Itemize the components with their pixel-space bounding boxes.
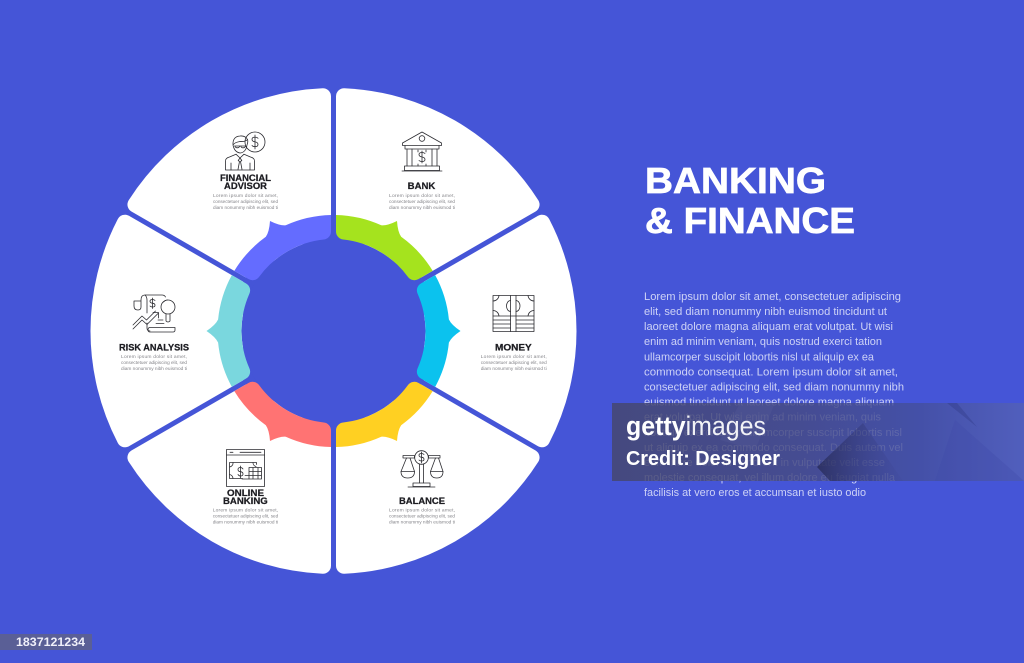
label: online banking: BANKING xyxy=(223,496,268,507)
title: BANKING xyxy=(645,160,826,201)
panel: bank segment xyxy=(278,62,556,311)
ring arc: risk analysis xyxy=(206,275,250,387)
text: bank description: Lorem ipsum dolor sit amet, xyxy=(389,193,455,199)
text block: body copy: consectetuer adipiscing elit, sed diam nonummy nibh xyxy=(644,382,904,394)
panel: balance segment xyxy=(278,351,556,600)
label: money: MONEY xyxy=(495,343,532,354)
ring arc: balance xyxy=(327,375,445,469)
center circle xyxy=(242,239,426,423)
text block: body copy: enim ad minim veniam, quis nostrud exerci tation xyxy=(644,336,882,348)
image id tag xyxy=(0,634,92,650)
text: financial advisor description: consectetuer adipiscing elit, sed xyxy=(213,199,278,205)
text: bank description: diam nonummy nibh euismod ti xyxy=(389,205,455,211)
title: & FINANCE xyxy=(645,200,855,241)
text: financial advisor description: diam nonummy nibh euismod ti xyxy=(213,205,278,211)
text block: body copy xyxy=(644,291,904,499)
text: bank description xyxy=(389,193,455,211)
wheel diagram xyxy=(91,62,576,600)
label: risk analysis: RISK ANALYSIS xyxy=(119,343,189,354)
panel: risk analysis segment xyxy=(91,215,243,447)
text: balance description: Lorem ipsum dolor sit amet, xyxy=(389,508,455,514)
panel: online banking segment xyxy=(111,351,389,600)
text block: body copy: erat volutpat. Ut wisi enim ad minim veniam, quis xyxy=(644,412,881,424)
text: financial advisor description xyxy=(213,193,278,211)
text block: body copy: nostrud exerci tation ullamcorper suscipit lobortis nisl xyxy=(644,427,902,439)
text block: body copy: molestie consequat, vel illum dolore eu feugiat nulla xyxy=(644,472,896,484)
ring arc: money xyxy=(417,275,460,387)
text: online banking description: diam nonummy nibh euismod ti xyxy=(213,520,278,526)
watermark band xyxy=(612,403,1024,481)
label: financial advisor xyxy=(220,173,271,192)
icon: online banking xyxy=(226,450,264,486)
text: online banking description: consectetuer adipiscing elit, sed xyxy=(213,514,278,520)
text: balance description: consectetuer adipiscing elit, sed xyxy=(389,514,455,520)
text: balance description xyxy=(389,508,455,526)
text: balance description: diam nonummy nibh euismod ti xyxy=(389,520,455,526)
text: risk analysis description: consectetuer adipiscing elit, sed xyxy=(121,360,187,366)
text: bank description: consectetuer adipiscing elit, sed xyxy=(389,199,455,205)
label: financial advisor: ADVISOR xyxy=(224,181,267,192)
icon: bank xyxy=(402,132,442,171)
text: online banking description: Lorem ipsum dolor sit amet, xyxy=(213,508,278,514)
text: risk analysis description: diam nonummy nibh euismod ti xyxy=(121,366,187,372)
label: balance: BALANCE xyxy=(399,496,445,507)
text: financial advisor description: Lorem ipsum dolor sit amet, xyxy=(213,193,278,199)
text: money description: consectetuer adipiscing elit, sed xyxy=(481,360,547,366)
text block: body copy: commodo consequat. Lorem ipsum dolor sit amet, xyxy=(644,366,898,378)
icon: financial advisor xyxy=(226,132,265,170)
text: risk analysis description: Lorem ipsum dolor sit amet, xyxy=(121,354,187,360)
text block: body copy: elit, sed diam nonummy nibh euismod tincidunt ut xyxy=(644,306,887,318)
label: online banking xyxy=(223,488,268,507)
text block: body copy: laoreet dolore magna aliquam erat volutpat. Ut wisi xyxy=(644,321,893,333)
text block: body copy: facilisis at vero eros et accumsan et iusto odio xyxy=(644,487,866,499)
ring arc: bank xyxy=(327,193,445,287)
ring arc: online banking xyxy=(222,375,340,469)
icon: balance xyxy=(401,451,443,487)
icon: risk analysis xyxy=(133,295,175,332)
text block: body copy: eum iriure dolor in hendrerit in vulputate velit esse xyxy=(644,457,885,469)
text block: body copy: Lorem ipsum dolor sit amet, consectetuer adipiscing xyxy=(644,291,901,303)
watermark credit text: Credit: Designer xyxy=(626,448,780,470)
panel: financial advisor segment xyxy=(111,62,389,311)
text: money description: Lorem ipsum dolor sit amet, xyxy=(481,354,547,360)
icon: money xyxy=(493,296,534,332)
title xyxy=(645,160,855,241)
label: financial advisor: FINANCIAL xyxy=(220,173,271,184)
label: online banking: ONLINE xyxy=(227,488,264,499)
text: online banking description xyxy=(213,508,278,526)
text block: body copy: euismod tincidunt ut laoreet dolore magna aliquam xyxy=(644,397,894,409)
image id tag: 1837121234 xyxy=(16,635,85,649)
text block: body copy: ut aliquip ex ea commodo consequat. Duis autem vel xyxy=(644,442,903,454)
ring arc: financial advisor xyxy=(222,193,340,287)
watermark logo text: gettyimages xyxy=(626,411,766,441)
panel: money segment xyxy=(424,215,576,447)
label: bank: BANK xyxy=(408,181,435,192)
text: risk analysis description xyxy=(121,354,187,372)
text: money description xyxy=(481,354,547,372)
text block: body copy: ullamcorper suscipit lobortis nisl ut aliquip ex ea xyxy=(644,351,875,363)
text: money description: diam nonummy nibh euismod ti xyxy=(481,366,547,372)
